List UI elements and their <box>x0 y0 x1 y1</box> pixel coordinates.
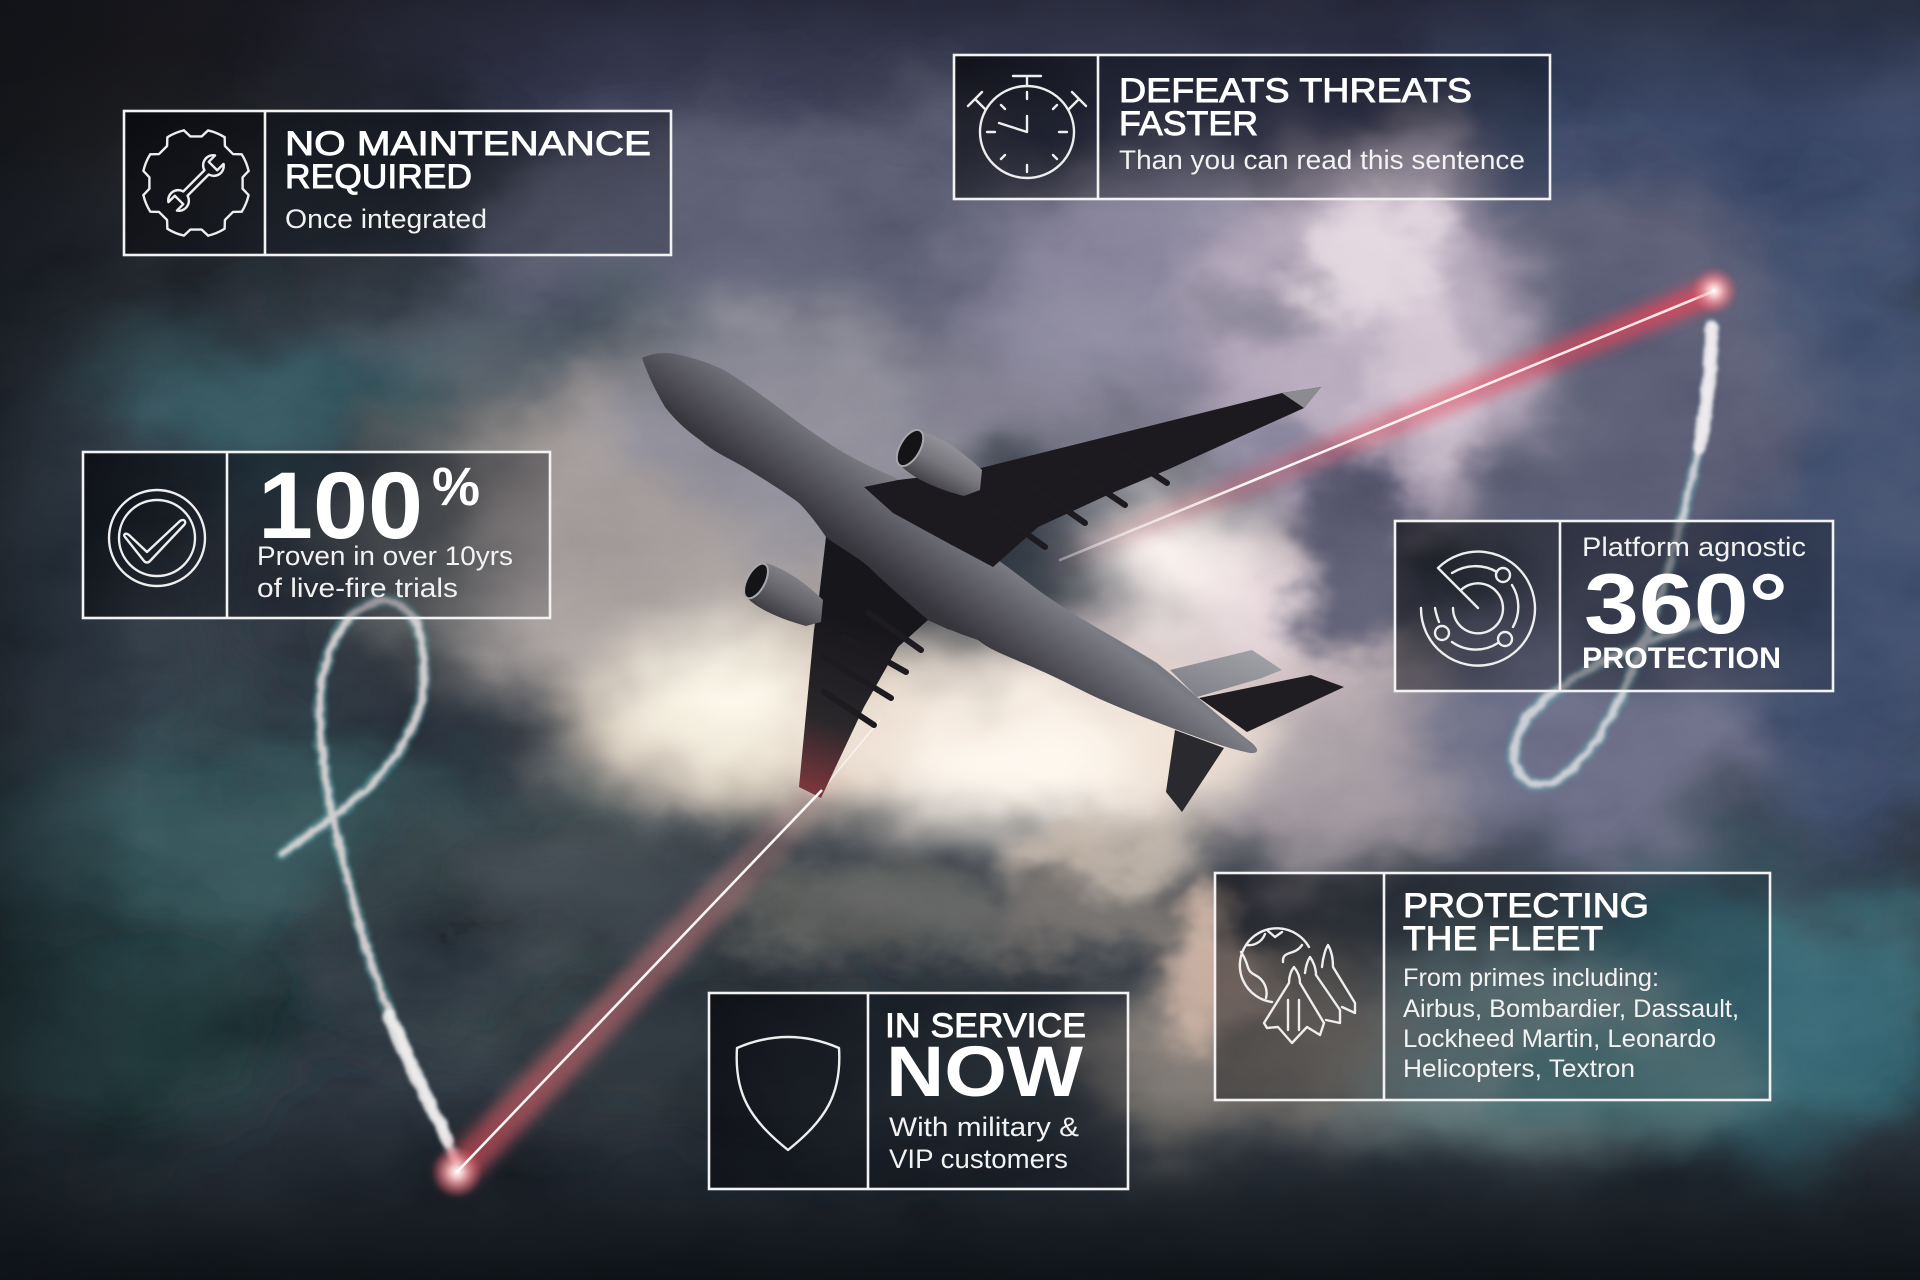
body text: Lockheed Martin, Leonardo <box>1403 1025 1716 1053</box>
icon: check mark in circles <box>109 490 205 586</box>
panel: in service now <box>709 993 1128 1189</box>
heading: NO MAINTENANCE <box>285 125 651 163</box>
big word: NOW <box>886 1033 1083 1112</box>
aircraft <box>642 353 1344 812</box>
body text line two: VIP customers <box>889 1144 1068 1174</box>
big number: 100 <box>258 453 423 559</box>
icon: gear and wrench <box>139 126 253 240</box>
panel: no maintenance <box>124 111 671 255</box>
body text: From primes including: <box>1403 964 1659 992</box>
laser beam with red glow <box>431 267 1738 1198</box>
right wing <box>864 387 1321 567</box>
icon: stopwatch <box>968 76 1086 178</box>
flap fairings <box>824 450 1167 725</box>
body text: Airbus, Bombardier, Dassault, <box>1403 995 1739 1023</box>
panel: defeats threats <box>954 55 1550 199</box>
body text: Once integrated <box>285 204 487 234</box>
big number: 360° <box>1584 557 1788 652</box>
icon: radar <box>1421 552 1535 666</box>
panel: 100 percent <box>83 452 550 618</box>
body text: Than you can read this sentence <box>1119 145 1525 175</box>
smoke trail: left missile <box>282 600 457 1161</box>
icon: globe and jets <box>1240 928 1355 1043</box>
fuselage <box>642 353 1257 753</box>
heading: IN SERVICE <box>885 1007 1086 1045</box>
upper engine <box>891 426 982 496</box>
left wing <box>799 537 950 798</box>
body text: With military & <box>889 1112 1079 1142</box>
sub heading: PROTECTION <box>1582 642 1781 675</box>
heading: PROTECTING <box>1403 887 1649 925</box>
body text: Proven in over 10yrs <box>257 541 513 571</box>
percent sign: % <box>432 457 480 517</box>
tailplanes and fin <box>1166 650 1344 812</box>
body text: Helicopters, Textron <box>1403 1055 1635 1083</box>
heading line two: THE FLEET <box>1403 920 1603 958</box>
heading line two: REQUIRED <box>285 158 472 196</box>
panel: 360 protection <box>1395 521 1833 691</box>
laser beam front segment <box>457 790 822 1172</box>
heading: DEFEATS THREATS <box>1119 72 1472 110</box>
body text line two: of live-fire trials <box>257 573 458 603</box>
icon: shield <box>737 1037 839 1150</box>
winglet <box>1282 387 1321 408</box>
lower engine <box>739 560 823 626</box>
smoke trail: right missile <box>1514 324 1714 785</box>
body text: Platform agnostic <box>1582 532 1806 562</box>
panel: protecting the fleet <box>1215 873 1770 1100</box>
heading line two: FASTER <box>1119 105 1258 143</box>
